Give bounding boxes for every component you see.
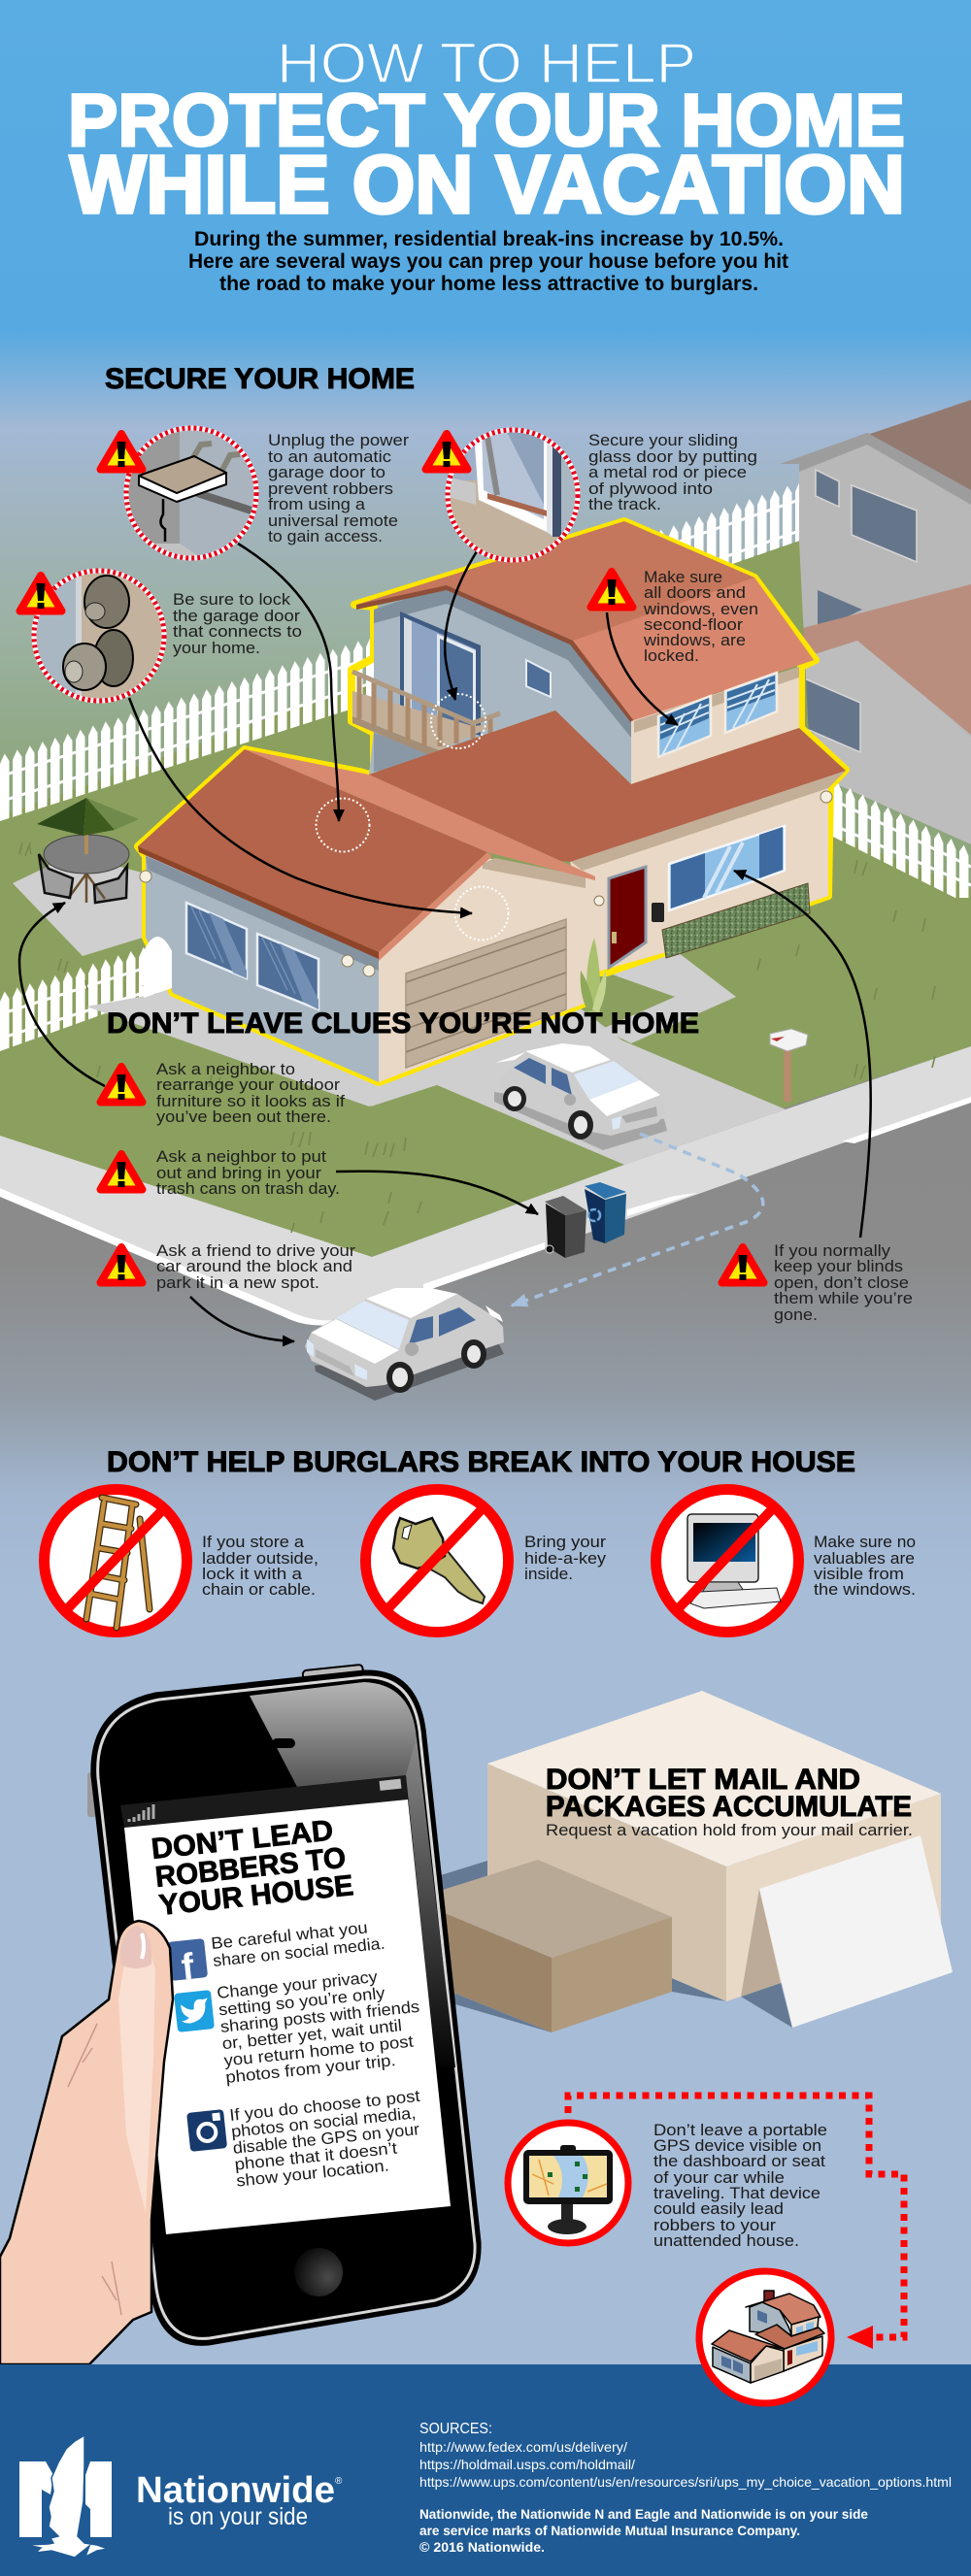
warning icon 4 xyxy=(590,572,633,608)
tip: garage interior door: Be sure to lock xyxy=(173,590,291,609)
GPS tip xyxy=(653,2121,827,2250)
tip: social media care: Be careful what you xyxy=(210,1918,369,1953)
tip: outdoor furniture xyxy=(156,1060,345,1126)
tip: trash cans: trash cans on trash day. xyxy=(156,1179,340,1198)
sources: https://www.ups.com/content/us/en/resources/sri/ups_my_choice_vacation_options.html xyxy=(419,2474,952,2490)
intro text: During the summer, residential break-ins increase by 10.5%. xyxy=(194,228,784,250)
yellow security outline xyxy=(138,521,846,1082)
GPS tip: traveling. That device xyxy=(653,2184,820,2202)
tip: move car: Ask a friend to drive your xyxy=(156,1241,355,1260)
right bezel sheen xyxy=(406,1737,455,2067)
plant xyxy=(581,938,606,1012)
tip: garage door power: to an automatic xyxy=(268,447,392,466)
icon: twitter xyxy=(174,1990,215,2032)
tip: valuables: visible from xyxy=(814,1565,904,1583)
tip: key xyxy=(524,1533,607,1583)
tip: blinds: keep your blinds xyxy=(774,1257,903,1275)
tip: disable GPS xyxy=(228,2087,428,2191)
doorbell intercom xyxy=(652,903,664,922)
tip: valuables: valuables are xyxy=(814,1549,915,1568)
tip: ladder: ladder outside, xyxy=(202,1549,318,1568)
GPS tip: robbers to your xyxy=(653,2216,776,2234)
dashed path: car movement xyxy=(512,1134,763,1305)
prohibition icon: key xyxy=(365,1489,509,1633)
long lower roof xyxy=(369,710,846,862)
Nationwide logo xyxy=(19,2435,343,2558)
tip: sliding door xyxy=(588,431,757,513)
tip: social media care: share on social media. xyxy=(212,1934,385,1970)
tip: garage door power: prevent robbers xyxy=(268,479,393,498)
grass tufts xyxy=(19,842,935,1233)
inset: door locks xyxy=(31,569,167,703)
tip: garage door power: universal remote xyxy=(268,512,398,530)
curb xyxy=(0,1097,971,1326)
tip: ladder: lock it with a xyxy=(202,1565,303,1583)
arrow: outdoor furniture xyxy=(19,903,105,1086)
sources: SOURCES: xyxy=(419,2421,492,2437)
packages xyxy=(441,1691,953,2032)
tip: trash cans xyxy=(156,1147,340,1198)
screen xyxy=(124,1800,451,2234)
legal text: are service marks of Nationwide Mutual Insurance Company. xyxy=(419,2523,800,2538)
tip: valuables xyxy=(814,1533,916,1599)
front door xyxy=(609,867,646,968)
warning icon 7 xyxy=(101,1247,142,1283)
sidewalk xyxy=(0,1046,971,1320)
tip: privacy setting: or, better yet, wait until xyxy=(221,2016,403,2053)
heading: don't leave clues: DON’T LEAVE CLUES YOU’RE NOT HOME xyxy=(107,1007,699,1040)
tip: blinds: them while you’re xyxy=(774,1289,913,1307)
tip: key: Bring your xyxy=(524,1533,606,1551)
white picket fences xyxy=(0,476,971,1058)
icon: facebook xyxy=(167,1938,209,1990)
hedge xyxy=(662,883,810,958)
GPS tip: the dashboard or seat xyxy=(653,2152,825,2170)
patio with table and umbrella xyxy=(13,798,146,956)
tip: sliding door: the track. xyxy=(588,495,661,513)
tip: trash cans: Ask a neighbor to put xyxy=(156,1147,326,1166)
tip: move car: car around the block and xyxy=(156,1257,352,1275)
phone heading xyxy=(150,1814,355,1922)
tip: blinds: open, don’t close xyxy=(774,1273,909,1292)
legal text: © 2016 Nationwide. xyxy=(419,2539,545,2555)
street car xyxy=(305,1288,504,1401)
arrow: trash cans xyxy=(336,1172,538,1214)
concrete driveway and paths xyxy=(141,946,786,1165)
outdoor lights xyxy=(140,791,832,976)
tip: blinds xyxy=(774,1241,913,1324)
inset: garage opener xyxy=(121,427,262,563)
tip: privacy setting: sharing posts with friends xyxy=(219,1998,420,2036)
upper blue wall xyxy=(369,585,634,784)
heading: don't help burglars: DON’T HELP BURGLARS BREAK INTO YOUR HOUSE xyxy=(107,1446,855,1478)
icon: instagram xyxy=(186,2109,227,2152)
tip: doors and windows: locked. xyxy=(644,646,699,665)
side gate xyxy=(144,937,172,998)
arrow: garage interior door xyxy=(129,698,472,913)
arrow: sliding door xyxy=(445,551,477,700)
GPS tip: could easily lead xyxy=(653,2199,784,2218)
tip: disable GPS: show your location. xyxy=(235,2156,390,2191)
tip: move car: park it in a new spot. xyxy=(156,1273,319,1292)
heading: mail and packages: Request a vacation hold from your mail carrier. xyxy=(546,1821,913,1839)
speaker xyxy=(272,1738,295,1748)
house icon xyxy=(699,2271,831,2403)
tip: outdoor furniture: Ask a neighbor to xyxy=(156,1060,295,1078)
garage door xyxy=(406,919,566,1068)
picture window with blinds xyxy=(669,826,785,910)
tip: garage door power: to gain access. xyxy=(268,527,383,545)
tip: garage door power: from using a xyxy=(268,495,366,513)
phone heading: ROBBERS TO xyxy=(153,1842,348,1894)
tip: privacy setting: Change your privacy xyxy=(216,1967,379,2002)
intro text: the road to make your home less attractive to burglars. xyxy=(219,273,758,295)
tip: garage interior door: that connects to xyxy=(173,622,302,641)
tip: valuables: Make sure no xyxy=(814,1533,916,1551)
hand holding phone xyxy=(0,1921,173,2364)
left gable roof xyxy=(138,749,487,952)
title: HOW TO HELP xyxy=(277,32,696,95)
tagline: is on your side xyxy=(168,2503,308,2530)
tip: sliding door: of plywood into xyxy=(588,479,713,498)
tip: outdoor furniture: you’ve been out there. xyxy=(156,1107,331,1126)
tip: outdoor furniture: rearrange your outdoor xyxy=(156,1075,340,1094)
sources: https://holdmail.usps.com/holdmail/ xyxy=(419,2457,635,2472)
warning icon 1 xyxy=(101,434,142,470)
icon: facebook: f xyxy=(180,1946,196,1989)
prohibition icon: ladder xyxy=(45,1489,186,1633)
prohibition icon: computer xyxy=(656,1489,798,1633)
arrow: garage opener xyxy=(238,544,339,821)
warning icon 6 xyxy=(101,1154,142,1190)
tip: sliding door: glass door by putting xyxy=(588,447,757,466)
tip: trash cans: out and bring in your xyxy=(156,1164,321,1182)
smartphone xyxy=(87,1665,480,2344)
dormer wall and windows xyxy=(631,667,799,784)
tip: outdoor furniture: furniture so it looks as if xyxy=(156,1092,345,1110)
warning icon 2 xyxy=(425,434,468,470)
back lawn xyxy=(0,541,971,1257)
red dotted route xyxy=(568,2096,904,2337)
arrow: blinds xyxy=(734,871,871,1238)
mailbox xyxy=(770,1029,808,1102)
tip: ladder xyxy=(202,1533,318,1599)
target dotted circles xyxy=(317,694,509,940)
tip: disable GPS: If you do choose to post xyxy=(228,2087,421,2125)
tip: doors and windows: Make sure xyxy=(644,568,722,586)
tip: garage interior door xyxy=(173,590,302,657)
arrow: car xyxy=(190,1297,294,1341)
main house xyxy=(138,521,846,1082)
tip: key: hide-a-key xyxy=(524,1549,607,1568)
front lawn grass lower edge fill xyxy=(0,1009,624,1257)
sources xyxy=(419,2421,952,2490)
path by the house xyxy=(86,992,379,1106)
tip: ladder: chain or cable. xyxy=(202,1580,316,1599)
tip: blinds: If you normally xyxy=(774,1241,891,1260)
footer band xyxy=(0,2364,971,2576)
intro text: Here are several ways you can prep your house before you hit xyxy=(188,250,788,273)
title: WHILE ON VACATION xyxy=(70,139,905,230)
driveway car xyxy=(494,1043,667,1150)
small upstairs window xyxy=(526,660,551,697)
tip: privacy setting: setting so you’re only xyxy=(218,1984,386,2019)
garage windows xyxy=(186,903,247,978)
balcony xyxy=(352,672,500,759)
tip: key: inside. xyxy=(524,1565,573,1583)
tip: privacy setting: photos from your trip. xyxy=(224,2051,396,2087)
GPS tip: unattended house. xyxy=(653,2231,799,2250)
heading: secure your home: SECURE YOUR HOME xyxy=(105,363,415,395)
GPS tip: Don’t leave a portable xyxy=(653,2121,827,2139)
tip: social media care xyxy=(210,1917,385,1970)
tip: move car xyxy=(156,1241,355,1292)
road xyxy=(0,1068,971,1592)
tip: valuables: the windows. xyxy=(814,1580,916,1599)
garage front wall xyxy=(379,858,594,1082)
tip: garage door power: garage door to xyxy=(268,463,385,481)
tip: doors and windows: windows, are xyxy=(643,631,746,649)
tip: garage interior door: your home. xyxy=(173,639,260,657)
tip: doors and windows: windows, even xyxy=(643,600,758,618)
heading: mail and packages: PACKAGES ACCUMULATE xyxy=(546,1791,912,1823)
tip: ladder: If you store a xyxy=(202,1533,305,1551)
legal text: Nationwide, the Nationwide N and Eagle and Nationwide is on your side xyxy=(419,2506,868,2522)
route arrowhead xyxy=(847,2326,873,2349)
GPS tip: of your car while xyxy=(653,2168,785,2187)
tip: blinds: gone. xyxy=(774,1305,818,1324)
blue recycling bin xyxy=(585,1182,626,1243)
tip: doors and windows xyxy=(643,568,758,665)
title: PROTECT YOUR HOME xyxy=(68,80,905,162)
wordmark: Nationwide xyxy=(136,2470,335,2511)
home button xyxy=(294,2248,343,2296)
garage side wall xyxy=(146,854,379,1082)
heading: mail and packages xyxy=(546,1764,913,1839)
intro text xyxy=(188,228,788,295)
tip: garage interior door: the garage door xyxy=(173,607,300,625)
registered mark: ® xyxy=(335,2476,343,2487)
legal text xyxy=(419,2506,868,2555)
N and eagle mark xyxy=(19,2435,112,2558)
sliding glass door xyxy=(400,611,481,736)
tip: disable GPS: disable the GPS on your xyxy=(232,2120,420,2158)
arrow: windows xyxy=(607,612,678,725)
lower right wall xyxy=(570,776,828,973)
black trash can xyxy=(545,1196,586,1258)
tip: sliding door: Secure your sliding xyxy=(588,431,738,449)
status bar xyxy=(120,1775,408,1828)
tip: disable GPS: photos on social media, xyxy=(230,2103,417,2141)
upper roof xyxy=(356,521,814,721)
tip: doors and windows: all doors and xyxy=(644,583,746,602)
title xyxy=(68,32,905,230)
tip: garage door power: Unplug the power xyxy=(268,431,409,449)
inset: sliding door xyxy=(445,427,581,563)
sources: http://www.fedex.com/us/delivery/ xyxy=(419,2439,627,2455)
GPS tip: GPS device visible on xyxy=(653,2136,821,2155)
tip: doors and windows: second-floor xyxy=(644,615,743,634)
warning icon 8 xyxy=(722,1247,763,1283)
tip: privacy setting: you return home to post xyxy=(223,2032,415,2070)
phone heading: DON’T LEAD xyxy=(150,1814,335,1866)
tip: disable GPS: phone that it doesn’t xyxy=(234,2139,398,2174)
screen glare xyxy=(250,1682,417,1787)
warning icon 5 xyxy=(101,1067,142,1103)
tip: garage door power xyxy=(268,431,409,545)
page lower background xyxy=(0,1553,971,2368)
heading: mail and packages: DON’T LET MAIL AND xyxy=(546,1764,860,1796)
neighbor houses xyxy=(780,400,971,844)
phone heading: YOUR HOUSE xyxy=(157,1869,355,1922)
tip: privacy setting xyxy=(216,1964,425,2087)
tip: sliding door: a metal rod or piece xyxy=(588,463,747,481)
warning icon 3 xyxy=(19,576,62,611)
GPS icon xyxy=(508,2123,628,2243)
